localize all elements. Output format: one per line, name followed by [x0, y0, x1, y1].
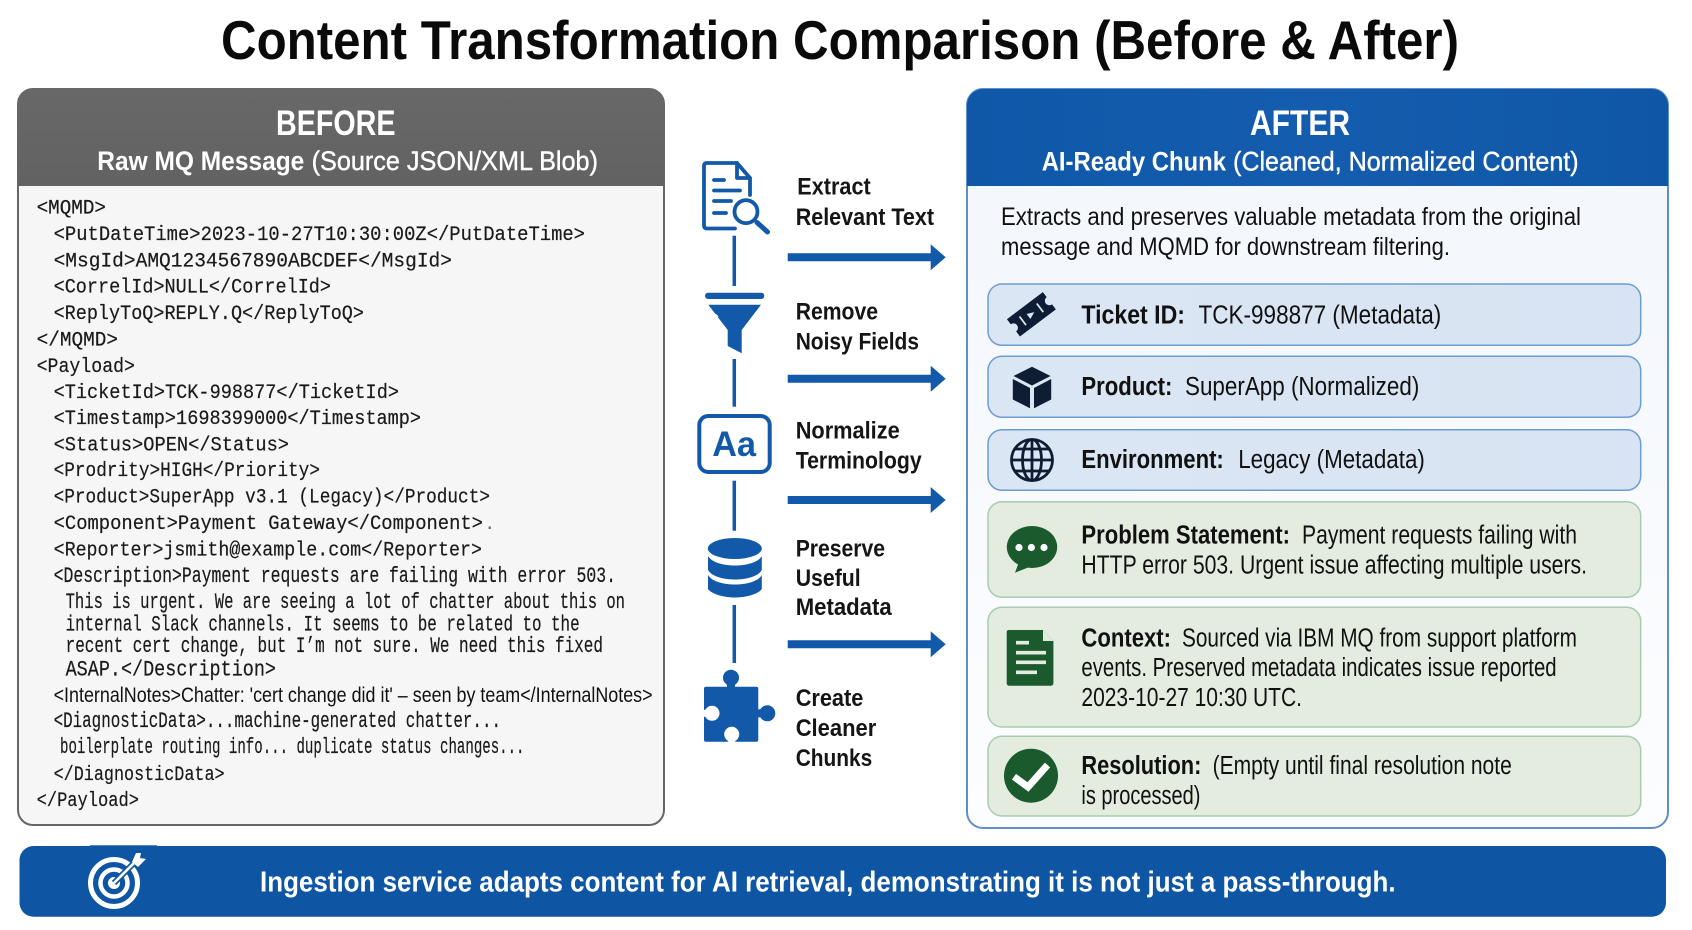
problem statement text: Payment requests failing with [1302, 521, 1577, 549]
intro text [1001, 203, 1581, 261]
resolution text [1081, 752, 1512, 810]
icon: puzzle piece [703, 670, 775, 743]
label: remove noisy fields: Noisy Fields [796, 328, 919, 355]
intro text: message and MQMD for downstream filtering. [1001, 233, 1450, 261]
raw message code block: <TicketId>TCK-998877</TicketId> [54, 382, 399, 405]
icon: check circle [1004, 749, 1058, 803]
label: extract relevant text: Extract [797, 173, 871, 200]
label: extract relevant text [796, 173, 934, 231]
arrow 1 [788, 244, 946, 270]
center transformation column [699, 163, 946, 772]
resolution text: (Empty until final resolution note [1213, 752, 1512, 780]
context text: 2023-10-27 10:30 UTC. [1081, 684, 1302, 712]
icon: chat bubble [1007, 526, 1057, 573]
raw message code block: <Description>Payment requests are failing with error 503. [54, 564, 616, 589]
label: normalize terminology: Terminology [796, 447, 922, 474]
raw message code block: <PutDateTime>2023-10-27T10:30:00Z</PutDateTime> [54, 224, 585, 247]
before heading: BEFORE [276, 104, 396, 143]
intro text: Extracts and preserves valuable metadata from the original [1001, 203, 1581, 231]
arrow 2 [788, 366, 946, 392]
raw message code block: <Component>Payment Gateway</Component> [54, 513, 483, 536]
row: product [988, 356, 1641, 417]
icon: ticket [1007, 292, 1056, 336]
context text: Sourced via IBM MQ from support platform [1182, 625, 1577, 653]
ticket id label: Ticket ID: [1081, 301, 1185, 329]
after subheading bold: AI-Ready Chunk [1042, 147, 1227, 177]
raw message code block: </MQMD> [37, 330, 118, 352]
after heading: AFTER [1250, 104, 1350, 143]
icon: database [708, 538, 762, 598]
arrow 3 [788, 487, 946, 513]
label: extract relevant text: Relevant Text [796, 204, 934, 231]
icon: box [1013, 367, 1051, 408]
label: create cleaner chunks: Chunks [796, 745, 872, 772]
before subheading detail: (Source JSON/XML Blob) [312, 146, 598, 176]
label: remove noisy fields [796, 298, 919, 355]
raw message code block: <Timestamp>1698399000</Timestamp> [54, 408, 421, 431]
before header [18, 89, 664, 186]
context label: Context: [1081, 625, 1171, 653]
raw message code block: </Payload> [37, 790, 139, 813]
raw message code block: </DiagnosticData> [54, 764, 225, 787]
raw message code block: <ReplyToQ>REPLY.Q</ReplyToQ> [54, 303, 364, 326]
icon: document search [704, 163, 768, 232]
raw message code block: <MQMD> [37, 198, 106, 220]
label: create cleaner chunks [796, 685, 876, 772]
raw message code block: recent cert change, but I’m not sure. We need this fixed [66, 634, 603, 659]
environment value: Legacy (Metadata) [1238, 446, 1425, 474]
icon: funnel [705, 293, 764, 353]
problem statement label: Problem Statement: [1081, 521, 1290, 549]
environment label: Environment: [1081, 446, 1224, 474]
problem statement text [1081, 521, 1587, 579]
context text [1081, 625, 1577, 712]
raw message code block: This is urgent. We are seeing a lot of chatter about this on [66, 590, 625, 615]
title: Content Transformation Comparison (Before & After) [221, 9, 1459, 71]
raw message code block: <DiagnosticData>...machine-generated chatter... [54, 709, 501, 734]
raw message code block: <Reporter>jsmith@example.com</Reporter> [54, 540, 482, 563]
raw message code block: <Payload> [37, 356, 135, 379]
row: ticket id [988, 284, 1641, 345]
label: preserve useful metadata: Useful [796, 565, 861, 592]
product label: Product: [1081, 373, 1172, 401]
after header [967, 89, 1668, 186]
label: normalize terminology [796, 417, 922, 474]
context text: events. Preserved metadata indicates issue reported [1081, 654, 1557, 682]
raw message code block: boilerplate routing info... duplicate status changes... [60, 735, 524, 760]
banner text: Ingestion service adapts content for AI retrieval, demonstrating it is not just a pass-through. [260, 867, 1396, 899]
row: resolution [988, 736, 1641, 816]
label: normalize terminology: Normalize [796, 417, 900, 444]
icon: Aa typography [699, 416, 770, 472]
icon: globe [1012, 440, 1052, 480]
raw message code block [37, 198, 653, 813]
resolution label: Resolution: [1081, 752, 1201, 780]
row: problem statement [988, 502, 1641, 597]
panel: after [967, 89, 1668, 828]
ticket id value: TCK-998877 (Metadata) [1198, 301, 1441, 329]
label: preserve useful metadata [796, 536, 892, 621]
label: create cleaner chunks: Create [796, 685, 863, 712]
label: remove noisy fields: Remove [796, 298, 878, 325]
bottom banner [20, 845, 1666, 917]
raw message code block: ASAP.</Description> [66, 658, 276, 683]
label: preserve useful metadata: Preserve [796, 536, 885, 563]
label: create cleaner chunks: Cleaner [796, 715, 876, 742]
icon: green document [1007, 630, 1053, 686]
raw message code block: <InternalNotes>Chatter: 'cert change did it' – seen by team</InternalNotes> [54, 683, 653, 707]
raw message code block: <MsgId>AMQ1234567890ABCDEF</MsgId> [54, 250, 452, 274]
problem statement text: HTTP error 503. Urgent issue affecting multiple users. [1081, 551, 1587, 579]
after subheading detail: (Cleaned, Normalized Content) [1233, 147, 1579, 177]
product value: SuperApp (Normalized) [1185, 373, 1419, 401]
raw message code block: <Product>SuperApp v3.1 (Legacy)</Product> [54, 487, 490, 510]
row: context [988, 607, 1641, 727]
arrow 4 [788, 631, 946, 657]
resolution text: is processed) [1081, 782, 1200, 810]
connector lines [733, 236, 736, 663]
icon: Aa typography: Aa [712, 425, 757, 464]
row: environment [988, 430, 1641, 490]
raw message code block: <Status>OPEN</Status> [54, 435, 289, 458]
panel: before [18, 89, 664, 825]
label: preserve useful metadata: Metadata [796, 594, 892, 621]
before subheading bold: Raw MQ Message [97, 146, 304, 176]
raw message code block: <Prodrity>HIGH</Priority> [54, 460, 320, 483]
raw message code block: <CorrelId>NULL</CorrelId> [54, 277, 331, 300]
icon: target [90, 853, 146, 906]
raw message code block: internal Slack channels. It seems to be related to the [66, 613, 580, 638]
